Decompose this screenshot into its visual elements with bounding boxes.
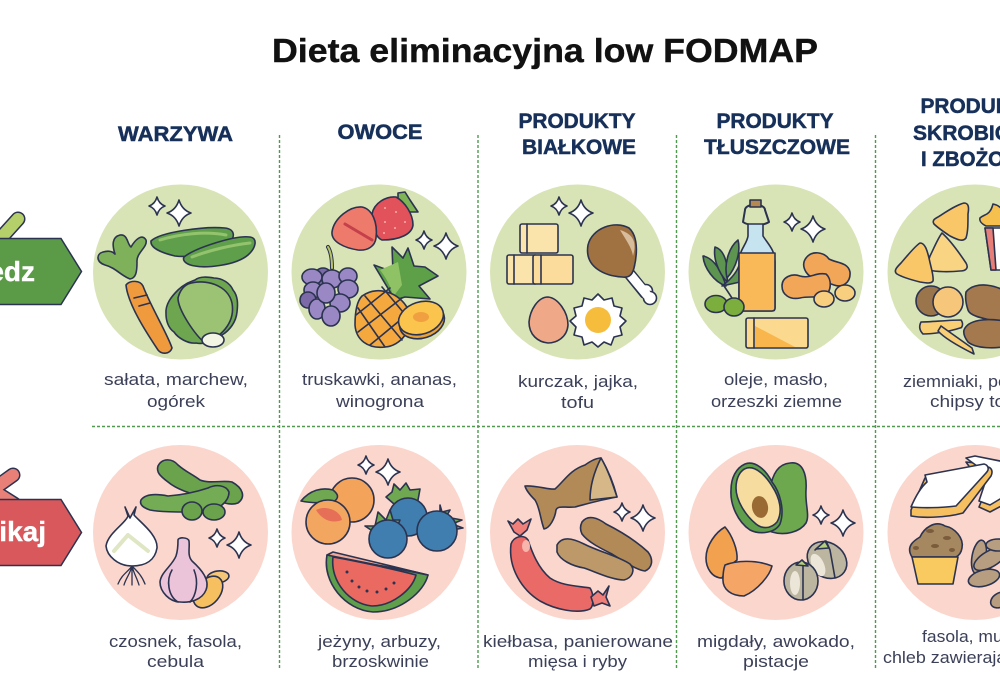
caption: owoce do unikania: brzoskwinie xyxy=(332,652,429,671)
icon: owoce wysokie xyxy=(301,456,463,612)
caption: białko dozwolone: tofu xyxy=(561,393,594,412)
panel: warzywa dozwolone xyxy=(93,184,268,360)
caption: warzywa dozwolone xyxy=(104,370,248,411)
caption: białko dozwolone: kurczak, jajka, xyxy=(518,372,638,391)
caption: białko do unikania: kiełbasa, panierowane xyxy=(483,632,673,651)
caption: tłuszcze do unikania: pistacje xyxy=(743,652,809,671)
caption: warzywa do unikania xyxy=(109,632,242,671)
heading: owoce: OWOCE xyxy=(338,121,422,144)
icon: warzywa xyxy=(98,197,255,353)
caption: owoce dozwolone: winogrona xyxy=(335,392,425,411)
caption: tłuszcze dozwolone: orzeszki ziemne xyxy=(711,392,842,411)
heading: produkty białkowe: BIAŁKOWE xyxy=(522,136,636,159)
heading: warzywa: WARZYWA xyxy=(118,123,233,146)
panel: owoce dozwolone xyxy=(292,184,466,360)
caption: tłuszcze dozwolone xyxy=(711,370,842,411)
icon: tłuszcze xyxy=(703,200,855,348)
caption: owoce do unikania: jeżyny, arbuzy, xyxy=(317,632,441,651)
icon: białko wysokie xyxy=(508,458,655,611)
caption: skrobia dozwolona xyxy=(903,372,1000,411)
panel: białko dozwolone xyxy=(490,184,665,360)
icon: owoce xyxy=(300,192,458,347)
heading: produkty białkowe: PRODUKTY xyxy=(518,110,636,133)
panel: tłuszcze do unikania xyxy=(688,445,864,620)
icon: skrobia xyxy=(895,203,1000,354)
panel: warzywa do unikania xyxy=(93,445,268,620)
heading: produkty tłuszczowe: PRODUKTY xyxy=(716,110,834,133)
panel: skrobia dozwolona xyxy=(888,184,1000,360)
caption: warzywa dozwolone: sałata, marchew, xyxy=(104,370,248,389)
badge: unikaj xyxy=(0,475,82,566)
caption: skrobia do unikania xyxy=(883,627,1000,667)
title: Dieta eliminacyjna low FODMAP xyxy=(272,32,818,69)
caption: tłuszcze do unikania xyxy=(697,632,855,671)
badge: jedz xyxy=(0,219,82,304)
caption: tłuszcze do unikania: migdały, awokado, xyxy=(697,632,855,651)
heading: produkty tłuszczowe: TŁUSZCZOWE xyxy=(704,136,850,159)
heading: produkty białkowe xyxy=(518,110,636,159)
panel: tłuszcze dozwolone xyxy=(688,184,864,360)
icon: skrobia wysoka xyxy=(910,456,1000,611)
icon: tłuszcze wysokie xyxy=(706,463,855,600)
caption: białko do unikania xyxy=(483,632,673,671)
heading: produkty tłuszczowe xyxy=(704,110,850,159)
caption: warzywa do unikania: czosnek, fasola, xyxy=(109,632,242,651)
caption: owoce dozwolone: truskawki, ananas, xyxy=(302,370,457,389)
icon: białko xyxy=(507,197,656,347)
panel: skrobia do unikania xyxy=(888,445,1000,620)
heading: produkty skrobiowe i zbożowe xyxy=(913,95,1000,171)
caption: owoce dozwolone xyxy=(302,370,457,411)
caption: warzywa do unikania: cebula xyxy=(147,652,205,671)
icon: warzywa wysokie xyxy=(106,460,251,614)
caption: białko dozwolone xyxy=(518,372,638,412)
panel: owoce do unikania xyxy=(292,445,466,620)
caption: tłuszcze dozwolone: oleje, masło, xyxy=(724,370,828,389)
caption: owoce do unikania xyxy=(317,632,441,671)
caption: warzywa dozwolone: ogórek xyxy=(147,392,206,411)
caption: białko do unikania: mięsa i ryby xyxy=(528,652,628,671)
panel: białko do unikania xyxy=(490,445,665,620)
